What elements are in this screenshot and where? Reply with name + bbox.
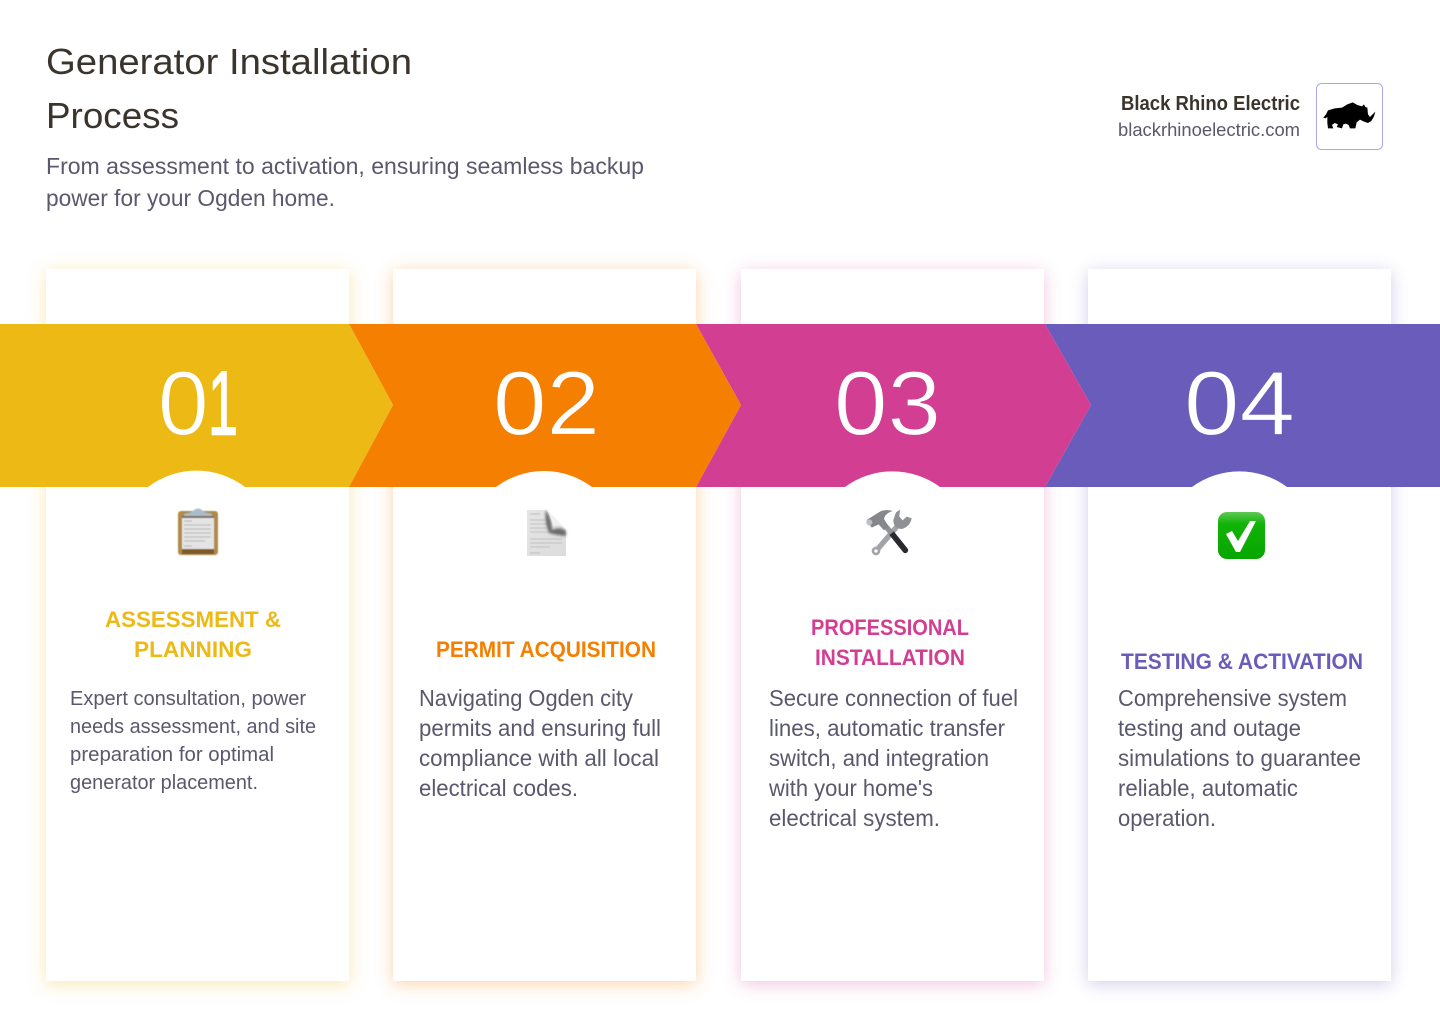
card 3 description: lines, automatic transfer [769,715,1005,741]
subtitle: power for your Ogden home. [46,185,335,211]
number 01: 0 [158,354,209,454]
card 2 heading: PERMIT ACQUISITION [436,637,656,662]
icon: green check box [1218,512,1265,559]
card 3 heading: PROFESSIONAL [811,615,969,640]
card 1 heading: PLANNING [134,637,252,662]
card 1 description: generator placement. [70,772,258,794]
card 2 description: permits and ensuring full [419,715,661,741]
card 3 heading: INSTALLATION [815,645,965,670]
card 2 description [419,685,661,801]
card 2 description: electrical codes. [419,775,578,801]
card 1 description: needs assessment, and site [70,716,316,738]
arc notch 4 [1192,471,1287,487]
chevron 2 [349,324,741,487]
subtitle [46,153,644,211]
logo: rhino [1316,84,1382,150]
card 1 description: preparation for optimal [70,744,274,766]
card 3 description: electrical system. [769,805,940,831]
panel: card 4 background [1088,269,1391,981]
arc notch 1 [148,471,245,487]
icon: document [527,510,566,556]
title: Generator Installation [46,41,412,82]
chevron 3 [696,324,1091,487]
card 3 description: Secure connection of fuel [769,685,1018,711]
number 01 [158,354,238,454]
card 3 description: switch, and integration [769,745,989,771]
card 3 heading [811,615,969,670]
card 2 description: compliance with all local [419,745,659,771]
arc notch 2 [496,471,592,487]
subtitle: From assessment to activation, ensuring seamless backup [46,153,644,179]
card 2 description: Navigating Ogden city [419,685,633,711]
icon: clipboard [178,508,218,555]
number 02: 02 [493,354,600,454]
card 4 description: testing and outage [1118,715,1301,741]
icon: hammer and wrench [866,510,912,555]
brand name and website: Black Rhino Electric [1121,93,1300,115]
number 01: 1 [208,354,238,454]
card 4 description: Comprehensive system [1118,685,1347,711]
card 3 description [768,685,1018,831]
brand name and website [1118,93,1300,140]
card 1 heading: ASSESSMENT & [105,607,281,632]
number 03: 03 [834,354,941,454]
panel: card 2 background [393,269,696,981]
number 04: 04 [1184,354,1295,454]
chevron 1 [0,324,393,487]
card 4 description [1118,685,1361,831]
chevron 4 [1045,324,1440,487]
title: Process [46,95,179,136]
card 4 description: reliable, automatic [1118,775,1298,801]
card 3 description: with your home's [768,775,933,801]
card 4 description: operation. [1118,805,1216,831]
arc notch 3 [845,471,940,487]
card 4 heading: TESTING & ACTIVATION [1121,649,1363,674]
card 1 description [70,688,316,794]
title [46,41,412,136]
panel: card 1 background [46,269,349,981]
card 1 description: Expert consultation, power [70,688,306,710]
card 1 heading [105,607,281,662]
card 4 description: simulations to guarantee [1118,745,1361,771]
brand name and website: blackrhinoelectric.com [1118,119,1300,140]
panel: card 3 background [741,269,1044,981]
